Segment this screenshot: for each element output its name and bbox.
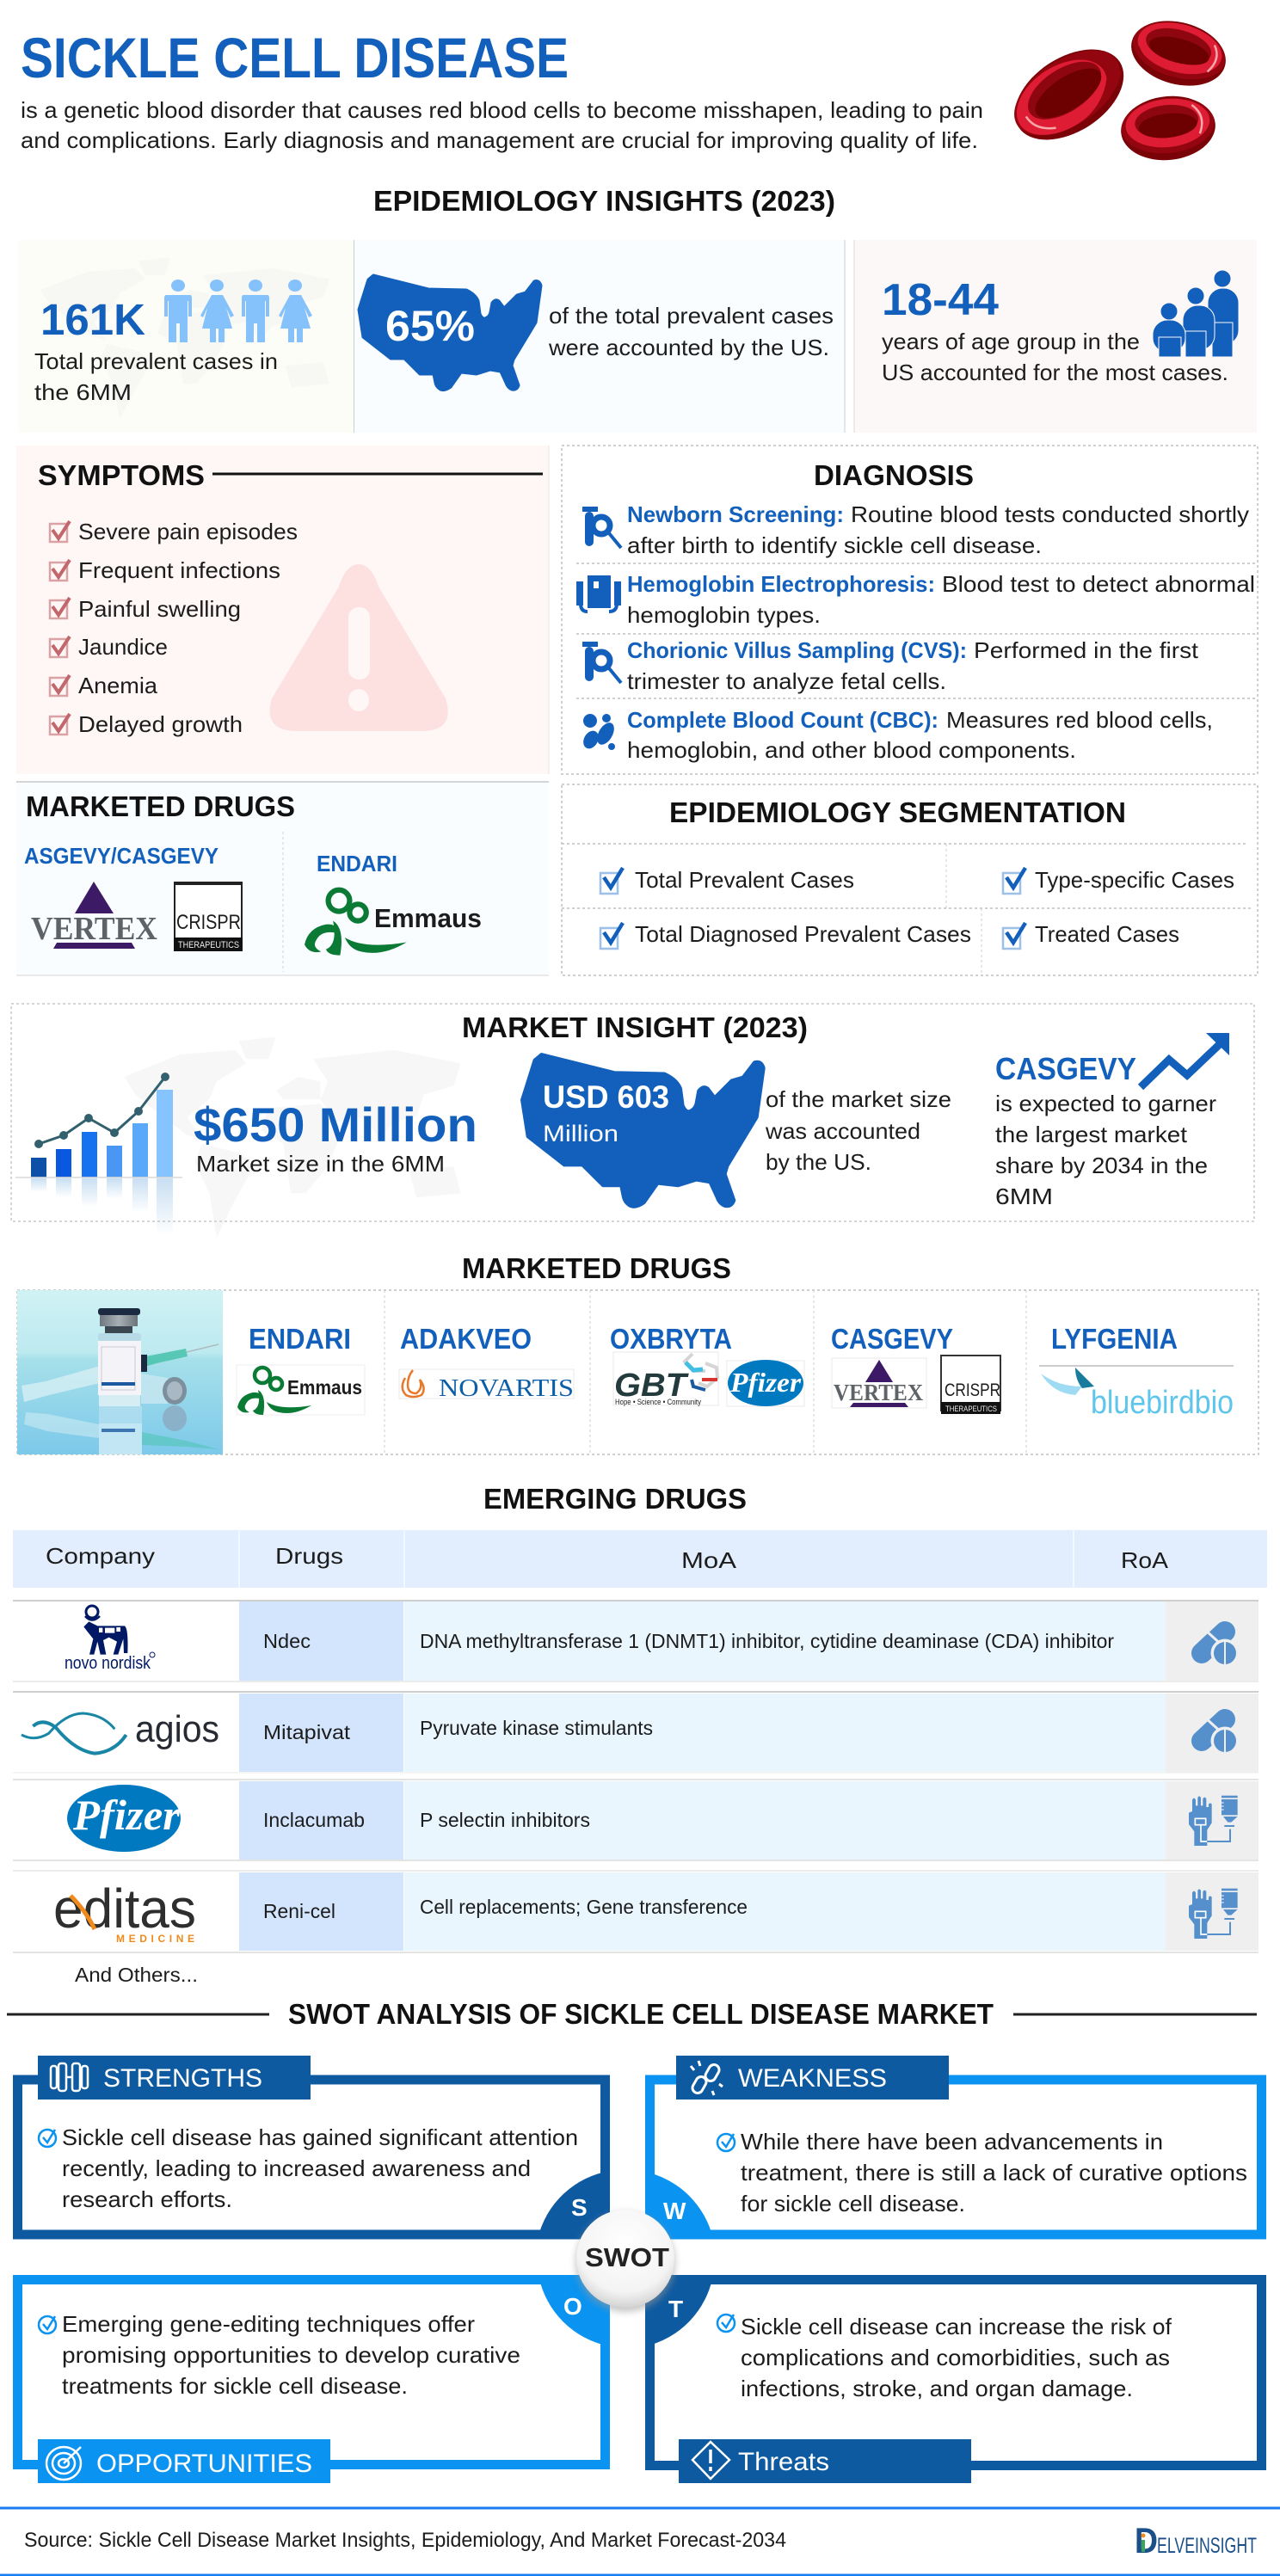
- weakness text: for sickle cell disease.: [741, 2191, 965, 2216]
- panel: strengths: [17, 2056, 610, 2239]
- drug: Lyfgenia: [1039, 1323, 1234, 1421]
- item: complete blood count: [627, 707, 1213, 763]
- logo: Editas Medicine: editas: [53, 1878, 196, 1940]
- logo: CRISPR Therapeutics: THERAPEUTICS: [178, 940, 239, 950]
- description: CASGEVY: 6MM: [995, 1183, 1053, 1209]
- icon: red blood cells: [999, 11, 1233, 165]
- description: US share: of the market size: [766, 1086, 951, 1112]
- description: CASGEVY: is expected to garner: [995, 1091, 1216, 1116]
- logo: Pfizer: Pfizer: [72, 1791, 181, 1839]
- table header: MoA: [681, 1547, 737, 1573]
- icon: warning triangle: [270, 564, 448, 731]
- heading: epidemiology insights: EPIDEMIOLOGY INSIGHTS (2023): [373, 185, 835, 217]
- icon: family: [1153, 270, 1239, 357]
- stat: USD 603 Million: [543, 1079, 669, 1147]
- panel: market insight: [11, 1004, 1254, 1238]
- list: segments: Total Diagnosed Prevalent Cases: [635, 921, 971, 947]
- row: Ndec: Ndec: [263, 1630, 311, 1652]
- logo: Agios: [22, 1708, 219, 1754]
- list: symptom items: Severe pain episodes: [78, 519, 298, 544]
- item: hemoglobin electrophoresis: Hemoglobin Electrophoresis:: [627, 571, 935, 597]
- panel: diagnosis: [562, 446, 1258, 774]
- heading: diagnosis: DIAGNOSIS: [814, 459, 974, 491]
- row: Inclacumab: P selectin inhibitors: [420, 1809, 590, 1831]
- drug: Endari: ENDARI: [249, 1323, 351, 1355]
- row: Mitapivat: [22, 1694, 1258, 1773]
- item: hemoglobin electrophoresis: hemoglobin types.: [627, 602, 821, 628]
- icon: warning diamond: [692, 2442, 729, 2479]
- icon: growth arrow: [1141, 1033, 1229, 1087]
- threats text: [741, 2314, 1172, 2401]
- table header: Drugs: [275, 1543, 343, 1569]
- list: symptom items: [50, 519, 298, 737]
- item: complete blood count: Complete Blood Count (CBC):: [627, 707, 938, 733]
- intro text: and complications. Early diagnosis and management are crucial for improving quality of life.: [21, 127, 978, 153]
- weakness text: While there have been advancements in: [741, 2129, 1163, 2155]
- panel: US share: [354, 240, 845, 433]
- description: [548, 303, 834, 360]
- drug: Oxbryta: OXBRYTA: [610, 1323, 732, 1355]
- icon: US map: [359, 275, 541, 390]
- stat: 161K: 161K: [40, 295, 145, 344]
- drug: Oxbryta: Hope • Science • Community: [615, 1398, 701, 1406]
- stat: 65%: 65%: [385, 302, 475, 350]
- list: symptom items: Painful swelling: [78, 596, 241, 622]
- logo: Novo Nordisk: [65, 1606, 155, 1673]
- label: [34, 348, 278, 405]
- panel: symptoms: [16, 446, 549, 774]
- opportunities label: [38, 2439, 330, 2483]
- drug: Oxbryta: GBT: [614, 1368, 689, 1404]
- opportunities text: Emerging gene-editing techniques offer: [62, 2311, 475, 2337]
- heading: market insight: MARKET INSIGHT (2023): [462, 1011, 808, 1043]
- icon: oral pills: [1202, 1718, 1239, 1755]
- table: emerging drugs: [13, 1527, 1267, 1952]
- list: segments: Type-specific Cases: [1035, 867, 1234, 893]
- threats label: Threats: [738, 2448, 829, 2476]
- world map watermark: [40, 257, 329, 420]
- letter W: W: [663, 2198, 686, 2224]
- list: segments: [635, 867, 1234, 947]
- drug: Endari: Emmaus: [287, 1376, 362, 1399]
- drug: Adakveo: ADAKVEO: [400, 1323, 532, 1355]
- heading: symptoms: SYMPTOMS: [38, 459, 205, 491]
- list: symptom items: Frequent infections: [78, 557, 280, 583]
- weakness text: [741, 2129, 1247, 2216]
- row: Reni-cel: Reni-cel: [263, 1900, 335, 1922]
- description: CASGEVY: the largest market: [995, 1122, 1188, 1147]
- table header: [13, 1527, 1267, 1588]
- item: newborn screening: Newborn Screening:: [627, 501, 844, 527]
- icon: oral pills: [1202, 1630, 1239, 1667]
- strengths text: research efforts.: [62, 2186, 232, 2212]
- icon: people: [164, 280, 312, 342]
- icon: check: [39, 2130, 56, 2147]
- item: hemoglobin electrophoresis: Blood test to detect abnormal: [942, 571, 1255, 597]
- panel: epidemiology segmentation: [562, 784, 1258, 975]
- panel: marketed drugs (left): [16, 782, 549, 975]
- description: of the total prevalent cases: [549, 303, 834, 329]
- description: CASGEVY: [995, 1091, 1216, 1209]
- heading: SWOT analysis: SWOT ANALYSIS OF SICKLE CELL DISEASE MARKET: [288, 1998, 994, 2030]
- description: were accounted by the US.: [548, 335, 829, 360]
- panel: weakness: [645, 2056, 1261, 2239]
- panel: threats: [645, 2275, 1261, 2483]
- note: and others: And Others...: [75, 1964, 198, 1986]
- list: segments: Treated Cases: [1035, 921, 1179, 947]
- description: years of age group in the: [882, 329, 1140, 354]
- drug name: ENDARI: ENDARI: [317, 851, 397, 876]
- icon: electrophoresis device: [578, 577, 619, 612]
- description: US share: by the US.: [766, 1149, 871, 1175]
- item: complete blood count: hemoglobin, and other blood components.: [627, 737, 1076, 763]
- weakness text: treatment, there is still a lack of curative options: [741, 2160, 1247, 2186]
- strengths label: STRENGTHS: [103, 2064, 262, 2093]
- row: Ndec: [65, 1602, 1258, 1681]
- bar chart: market growth: [15, 1073, 182, 1235]
- logo: Pfizer: [67, 1785, 181, 1852]
- list: segments: Total Prevalent Cases: [635, 867, 854, 893]
- logo: Editas Medicine: MEDICINE: [116, 1933, 194, 1945]
- intro text: [21, 97, 983, 153]
- description: [882, 329, 1228, 385]
- row: Reni-cel: [53, 1872, 1258, 1951]
- logo: CRISPR Therapeutics: [174, 882, 243, 951]
- description: CASGEVY: share by 2034 in the: [995, 1153, 1208, 1178]
- item: complete blood count: Measures red blood cells,: [946, 707, 1213, 733]
- icon: test tube and magnifier: [582, 642, 621, 683]
- logo: Emmaus: Emmaus: [374, 903, 482, 933]
- icon: broken chain: [691, 2061, 723, 2095]
- heading: emerging drugs: EMERGING DRUGS: [483, 1483, 747, 1515]
- heading: marketed drugs: MARKETED DRUGS: [462, 1252, 731, 1284]
- footer: [0, 2508, 1280, 2575]
- logo: Vertex: VERTEX: [31, 911, 157, 947]
- opportunities text: treatments for sickle cell disease.: [62, 2373, 408, 2399]
- strengths text: [62, 2124, 578, 2212]
- drug: Lyfgenia: bluebirdbio: [1091, 1385, 1234, 1421]
- letter S: S: [571, 2194, 588, 2221]
- icon: target: [46, 2447, 81, 2480]
- item: chorionic villus sampling: [627, 637, 1199, 694]
- logo: Emmaus: [305, 890, 482, 956]
- description: US share: was accounted: [765, 1118, 920, 1144]
- panel: age group: [854, 240, 1257, 433]
- stat: $650 Million: $650 Million: [194, 1097, 477, 1152]
- panel: total prevalent cases: [19, 240, 354, 433]
- image: vial and syringe: [17, 1290, 223, 1454]
- icon: check: [717, 2134, 735, 2151]
- row: Mitapivat: Mitapivat: [263, 1721, 351, 1743]
- description: US accounted for the most cases.: [882, 360, 1228, 385]
- item: chorionic villus sampling: Performed in the first: [974, 637, 1199, 663]
- description: US share: [765, 1086, 951, 1175]
- heading: marketed drugs: MARKETED DRUGS: [26, 790, 295, 822]
- label: market size: Market size in the 6MM: [196, 1151, 445, 1177]
- strengths text: Sickle cell disease has gained significant attention: [62, 2124, 578, 2150]
- icon: blood cells: [581, 714, 618, 752]
- drug: Casgevy: THERAPEUTICS: [945, 1405, 997, 1413]
- item: chorionic villus sampling: Chorionic Villus Sampling (CVS):: [627, 637, 967, 663]
- intro text: is a genetic blood disorder that causes red blood cells to become misshapen, leading to pain: [21, 97, 983, 123]
- logo: DelveInsight: D: [1135, 2520, 1158, 2561]
- table header: RoA: [1121, 1547, 1169, 1573]
- title: SICKLE CELL DISEASE: [21, 26, 569, 89]
- icon: infusion: [1189, 1889, 1238, 1939]
- panel: opportunities: [17, 2275, 610, 2483]
- SWOT centre circle: SWOT: [585, 2242, 669, 2272]
- opportunities text: [62, 2311, 520, 2399]
- icon: check: [717, 2315, 735, 2332]
- logo: CRISPR Therapeutics: CRISPR: [176, 911, 241, 934]
- SWOT centre circle: [575, 2210, 675, 2312]
- label: the 6MM: [34, 379, 132, 405]
- icon: test tube and magnifier: [582, 507, 621, 548]
- source: Source: Sickle Cell Disease Market Insights, Epidemiology, And Market Forecast-2034: [24, 2529, 786, 2552]
- item: newborn screening: Routine blood tests conducted shortly: [851, 501, 1249, 527]
- stat: USD 603 Million: USD 603: [543, 1079, 669, 1115]
- table header: Company: [46, 1543, 155, 1569]
- drug: Oxbryta: [610, 1323, 804, 1406]
- strengths label: [38, 2056, 311, 2100]
- drug: Adakveo: NOVARTIS: [439, 1375, 574, 1402]
- row: Inclacumab: Inclacumab: [263, 1809, 365, 1831]
- strengths text: recently, leading to increased awareness and: [62, 2155, 531, 2181]
- row: Reni-cel: Cell replacements; Gene transference: [420, 1896, 748, 1918]
- logo: Agios: agios: [135, 1708, 219, 1750]
- logo: Novo Nordisk: novo nordisk: [65, 1654, 151, 1673]
- drug name: CASGEVY: CASGEVY: [995, 1051, 1136, 1086]
- drug: Casgevy: [831, 1323, 1000, 1414]
- world map watermark: [124, 1036, 461, 1238]
- item: newborn screening: after birth to identify sickle cell disease.: [627, 532, 1042, 558]
- row: Mitapivat: Pyruvate kinase stimulants: [420, 1717, 653, 1739]
- threats label: [679, 2439, 971, 2483]
- icon: US map: [522, 1054, 764, 1207]
- row: Ndec: DNA methyltransferase 1 (DNMT1) inhibitor, cytidine deaminase (CDA) inhibitor: [420, 1630, 1114, 1652]
- drug: Casgevy: CASGEVY: [831, 1323, 953, 1355]
- icons: check boxes: [600, 868, 1025, 949]
- heading: epidemiology segmentation: EPIDEMIOLOGY SEGMENTATION: [669, 796, 1126, 828]
- drug: Casgevy: VERTEX: [834, 1380, 923, 1405]
- weakness label: WEAKNESS: [738, 2064, 887, 2093]
- label: Total prevalent cases in: [34, 348, 278, 374]
- item: newborn screening: [627, 501, 1249, 558]
- item: hemoglobin electrophoresis: [627, 571, 1255, 628]
- stat: 18-44: 18-44: [882, 275, 999, 325]
- letter O: O: [563, 2293, 582, 2320]
- logo: DelveInsight: [1135, 2520, 1257, 2561]
- drug: Adakveo: [399, 1323, 574, 1402]
- weakness label: [676, 2056, 949, 2100]
- list: symptom items: Anemia: [78, 673, 158, 698]
- threats text: complications and comorbidities, such as: [741, 2345, 1170, 2370]
- drug: Endari: [237, 1323, 365, 1415]
- drug: Oxbryta: Pfizer: [729, 1367, 802, 1398]
- opportunities label: OPPORTUNITIES: [96, 2450, 312, 2478]
- panel: marketed drugs row: [17, 1290, 1258, 1454]
- logo: Vertex: [31, 882, 157, 949]
- threats text: Sickle cell disease can increase the risk of: [741, 2314, 1172, 2339]
- opportunities text: promising opportunities to develop curative: [62, 2342, 520, 2368]
- stat: USD 603 Million: Million: [543, 1121, 618, 1147]
- list: symptom items: Delayed growth: [78, 711, 243, 737]
- row: Inclacumab: [67, 1781, 1258, 1860]
- icon: check: [39, 2316, 56, 2333]
- drug: Lyfgenia: LYFGENIA: [1051, 1323, 1178, 1355]
- drug name: ASGEVY/CASGEVY: ASGEVY/CASGEVY: [24, 843, 218, 869]
- threats text: infections, stroke, and organ damage.: [741, 2376, 1133, 2401]
- letter T: T: [668, 2296, 683, 2322]
- drug: Casgevy: CRISPR: [945, 1380, 1000, 1400]
- icon: dumbbell: [51, 2063, 88, 2091]
- icon: infusion: [1189, 1796, 1238, 1846]
- list: symptom items: Jaundice: [78, 634, 168, 660]
- item: chorionic villus sampling: trimester to analyze fetal cells.: [627, 668, 946, 694]
